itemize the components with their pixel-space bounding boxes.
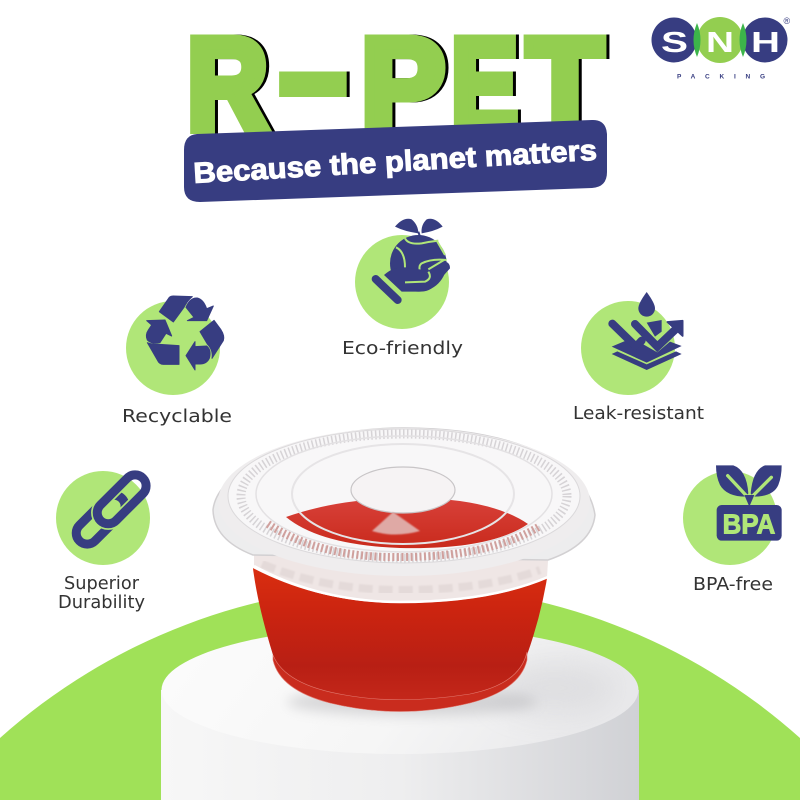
green dome background (0, 585, 800, 800)
logo: SNH Packing: ® (784, 16, 790, 26)
icon: chain links (72, 470, 151, 549)
lid centre dome (351, 467, 455, 513)
lid top surface (228, 429, 580, 563)
lid skirt (253, 545, 550, 602)
white cylinder pedestal (161, 626, 639, 800)
title: R-PET: P (361, 11, 445, 157)
cup base ring (273, 652, 527, 712)
skirt lower highlight (254, 566, 548, 602)
icon: hand holding globe with sprout (376, 219, 450, 300)
title: R-PET: T (530, 11, 606, 157)
logo: SNH Packing: N (706, 27, 734, 59)
banner: Because the planet matters: Because the planet matters (193, 135, 598, 190)
logo: SNH Packing: PACKING (677, 74, 765, 80)
lid ridges (241, 434, 567, 558)
feature: Leak-resistant (573, 292, 704, 424)
title: R-PET (187, 0, 606, 157)
skirt embossing (262, 564, 540, 590)
title: R-PET: - (279, 0, 347, 146)
lid rim (213, 428, 595, 560)
front ridges (268, 524, 540, 557)
title: R-PET: E (454, 11, 521, 157)
title: R-PET: R (187, 11, 268, 157)
logo: SNH Packing: H (751, 27, 780, 59)
feature: Recyclable: Recyclable (122, 406, 232, 427)
feature: Superior Durability: Durability (58, 592, 145, 613)
cup body (252, 560, 549, 712)
feature: Superior Durability: Superior (64, 573, 140, 594)
icon: recycling arrows (146, 296, 224, 370)
feature: Eco-friendly: Eco-friendly (342, 338, 463, 359)
feature: BPA-free: BPA-free (693, 574, 773, 595)
title: R-PET: E (451, 11, 518, 157)
embossed triangle (372, 512, 420, 534)
title: R-PET: - (282, 0, 350, 146)
logo: SNH Packing: S (661, 27, 688, 59)
banner: Because the planet matters (184, 120, 607, 202)
cup shadow (287, 688, 537, 716)
product: clear R-PET cup with red sauce (213, 428, 595, 716)
feature: Leak-resistant: Leak-resistant (573, 403, 704, 424)
sauce seen through lid (286, 498, 528, 548)
feature: BPA-free (683, 465, 782, 595)
title: R-PET: T (527, 11, 603, 157)
icon: BPA label with leaves: BPA (723, 508, 775, 539)
icon: water drop over layers (612, 292, 683, 370)
lid recess ring (292, 444, 514, 544)
title: R-PET: P (364, 11, 448, 157)
feature: Recyclable (122, 296, 232, 427)
feature: Superior Durability (56, 470, 151, 613)
feature: Eco-friendly (342, 219, 463, 359)
title: R-PET: R (190, 11, 271, 157)
logo: SNH Packing (652, 16, 790, 80)
